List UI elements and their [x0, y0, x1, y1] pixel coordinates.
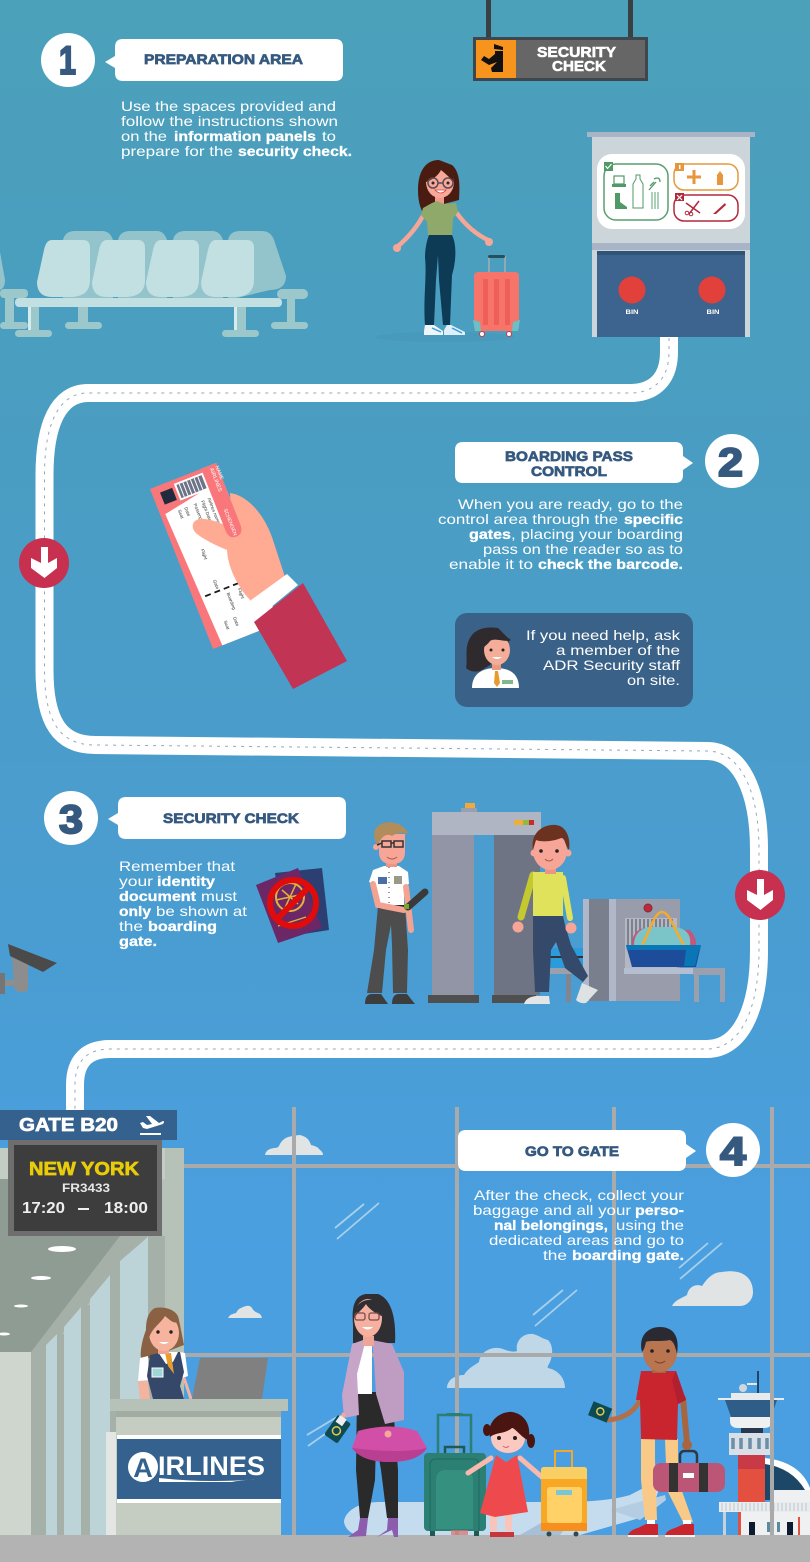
information panel: [597, 154, 745, 229]
route path with dashed line: [44, 330, 759, 1115]
help callout panel: a member of the: [556, 642, 680, 658]
cloud: [265, 1135, 323, 1155]
bin slots: BIN: [626, 310, 638, 316]
gate sign: GATE B20: [19, 1114, 118, 1135]
boarding pass: Gate: [212, 579, 220, 590]
step 4 body text: After the check, collect your: [474, 1187, 684, 1203]
help callout panel: ADR Security staff: [543, 657, 680, 673]
laptop: [192, 1358, 268, 1399]
step 3 body text: the: [119, 918, 143, 934]
boarding pass: Seat: [223, 620, 231, 631]
boarding pass: Flight Date: [200, 500, 213, 522]
information kiosk with bins: [587, 132, 755, 337]
boarding pass: Boarding: [226, 592, 237, 611]
step 2 body text: When you are ready, go to the: [458, 496, 683, 512]
step 3 body text: gate.: [119, 933, 157, 949]
step 2 heading bubble: CONTROL: [531, 463, 607, 479]
boarding pass: Airlines: [249, 583, 259, 599]
departure board: NEW YORK: [29, 1158, 140, 1179]
step 3 body text: identity: [157, 873, 215, 889]
step 4 body text: the: [543, 1247, 567, 1263]
step 2 body text: pass on the reader so as to: [483, 541, 683, 557]
step 3 body text: only: [119, 903, 151, 919]
step 2 heading bubble: [455, 442, 693, 483]
departure board: FR3433: [62, 1183, 110, 1195]
terminal building interior: [0, 1148, 184, 1535]
step 4 body text: using the: [616, 1217, 684, 1233]
departure board: [8, 1140, 162, 1236]
metal detector gate: [428, 803, 541, 1003]
security guard with wand: [365, 822, 425, 1004]
hand: [193, 493, 285, 602]
step 1 body text: on the: [121, 128, 167, 144]
airline logo panel: IRLINES: [158, 1451, 265, 1481]
step 1 body text: to: [322, 128, 336, 144]
step 3 body text: be shown at: [156, 903, 247, 919]
step 4 body text: perso-: [635, 1202, 684, 1218]
step 2 number badge: [705, 434, 759, 488]
boarding pass: Seat: [177, 509, 185, 520]
step 2 body text: control area through the: [438, 511, 618, 527]
step 1 heading bubble: [105, 39, 343, 81]
step 2 heading bubble: BOARDING PASS: [505, 448, 633, 464]
pass tab: AIRLINES: [208, 467, 223, 493]
pass tab: SCHENGEN: [222, 508, 238, 537]
step 3 body text: must: [201, 888, 237, 904]
step 4 number badge: 4: [720, 1130, 747, 1174]
icon: departing plane: [140, 1116, 164, 1135]
airline logo panel: A: [133, 1453, 153, 1483]
hanging sign: security check: [473, 0, 648, 81]
boarding pass: [150, 463, 279, 649]
gate sign: [0, 1110, 177, 1140]
waiting room benches: [0, 231, 308, 337]
departure board: 17:20: [22, 1200, 65, 1217]
boarding pass: Boarding: [229, 553, 240, 572]
help callout panel: If you need help, ask: [526, 627, 681, 643]
background plane: [344, 1478, 666, 1535]
boarding pass: Flight: [200, 548, 209, 561]
window frame: [184, 1107, 810, 1537]
passenger in yellow sweater: [512, 825, 598, 1004]
step 3 body text: boarding: [148, 918, 217, 934]
help callout panel: on site.: [627, 672, 680, 688]
step 2 body text: , placing your boarding: [511, 526, 683, 542]
shirt cuff: [251, 574, 298, 621]
bin slots: BIN: [706, 310, 720, 316]
step 4 body text: nal belongings,: [494, 1217, 608, 1233]
step 1 body text: information panels: [174, 128, 316, 144]
departure board: 18:00: [104, 1200, 148, 1217]
glass reflections: [307, 1203, 722, 1446]
pink handbag: [352, 1426, 427, 1462]
bin slots: [618, 276, 726, 316]
step 3 number badge: [44, 791, 98, 845]
x-ray baggage scanner: [543, 899, 725, 1002]
control tower and terminal: [718, 1107, 810, 1537]
step 4 number badge: [706, 1123, 760, 1177]
traveller with red suitcase: [375, 160, 520, 342]
arrow marker: first descent: [19, 538, 69, 588]
woman with pink handbag and passport: [324, 1294, 427, 1537]
step 1 body text: [121, 98, 352, 159]
arrow marker: second descent: [735, 870, 785, 920]
step 4 heading bubble: GO TO GATE: [525, 1143, 619, 1159]
boarding pass: Date: [232, 616, 240, 627]
step 4 heading bubble: [458, 1130, 696, 1171]
floor: [0, 1535, 810, 1562]
boarding pass: Airlines name: [207, 497, 221, 525]
green suitcase: [424, 1413, 486, 1536]
boarding pass: Date: [183, 506, 192, 517]
airport window: sky, clouds and frame: [184, 1107, 810, 1537]
step 2 body text: enable it to: [449, 556, 533, 572]
step 2 body text: [438, 496, 683, 572]
pass tab: [201, 462, 246, 540]
step 3 heading bubble: SECURITY CHECK: [163, 810, 299, 826]
icon: security camera: [0, 944, 57, 994]
step 1 body text: Use the spaces provided and: [121, 98, 336, 114]
step 3 body text: your: [119, 873, 153, 889]
jacket sleeve: [254, 583, 347, 689]
step 1 number badge: 1: [59, 39, 76, 83]
step 1 body text: security check.: [238, 143, 352, 159]
step 1 number badge: [41, 33, 95, 87]
hanging sign: security check: SECURITY: [537, 44, 616, 61]
duffel bag: [653, 1440, 725, 1492]
step 1 body text: follow the instructions shown: [121, 113, 338, 129]
step 3 heading bubble: [108, 797, 346, 839]
step 3 body text: [119, 858, 247, 949]
small cloud: [228, 1306, 262, 1318]
step 3 body text: document: [119, 888, 196, 904]
step 4 body text: [473, 1187, 684, 1263]
step 1 body text: prepare for the: [121, 143, 233, 159]
airline logo panel: [117, 1439, 281, 1499]
pass tab: NAME: [213, 465, 225, 481]
step 2 body text: gates: [469, 526, 511, 542]
check-in desk: [106, 1399, 288, 1535]
hand holding boarding pass: [150, 462, 347, 689]
white cloud: [672, 1271, 753, 1306]
hanging sign: security check: CHECK: [552, 58, 606, 75]
step 4 body text: boarding gate.: [572, 1247, 684, 1263]
step 4 body text: baggage and all your: [473, 1202, 631, 1218]
icon: crossed-out passports: [256, 868, 329, 943]
step 1 heading bubble: PREPARATION AREA: [144, 51, 303, 67]
pale cloud: [447, 1334, 565, 1388]
passport: [588, 1401, 612, 1423]
boarding pass: Flight: [237, 587, 246, 600]
step 2 body text: check the barcode.: [538, 556, 683, 572]
boarding pass: Passenger: [193, 503, 205, 525]
girl: [451, 1412, 543, 1537]
step 3 body text: Remember that: [119, 858, 235, 874]
step 3 number badge: 3: [59, 798, 83, 842]
step 2 number badge: 2: [718, 441, 743, 485]
step 2 body text: specific: [624, 511, 683, 527]
help callout panel: [455, 613, 693, 707]
yellow suitcase: [541, 1451, 587, 1536]
icon: security staff member: [466, 627, 519, 688]
passport: [324, 1414, 352, 1444]
man with duffel bag and passport: [588, 1327, 725, 1537]
airline agent with laptop: [138, 1308, 268, 1399]
step 4 body text: dedicated areas and go to: [489, 1232, 684, 1248]
